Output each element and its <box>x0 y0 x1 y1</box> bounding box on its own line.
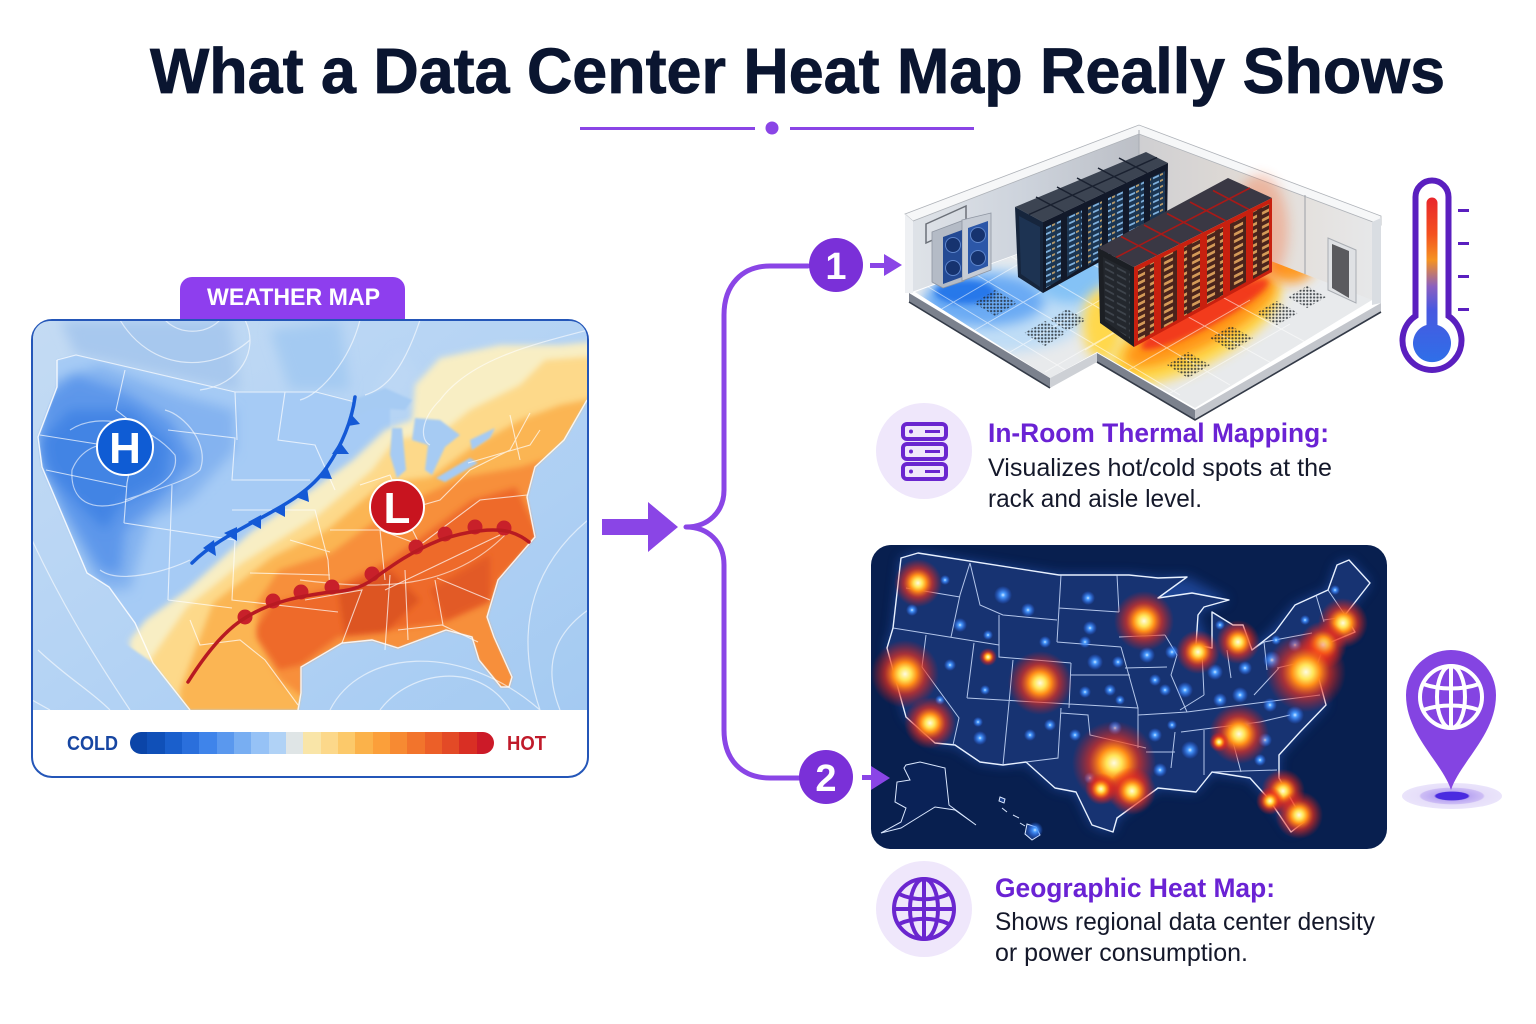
title divider <box>580 122 974 134</box>
hot spots <box>871 559 1368 839</box>
low pressure marker <box>370 480 424 534</box>
weather map tab: WEATHER MAP <box>207 284 380 311</box>
text: geographic heat map: Geographic Heat Map: <box>995 873 1275 903</box>
text: geographic heat map: Shows regional data center density <box>995 908 1375 936</box>
cooling units <box>926 206 991 288</box>
step badge 2: 2 <box>815 758 837 800</box>
temperature map <box>32 320 610 730</box>
land hot bands <box>130 340 610 730</box>
arrow: weather map to heat map types <box>602 502 678 552</box>
blue city lights <box>906 575 1340 838</box>
step badge 1: 1 <box>825 246 847 288</box>
panel: weather map <box>32 277 610 777</box>
state lines <box>40 355 540 705</box>
contour lines <box>32 320 588 710</box>
high pressure marker: H <box>109 424 141 473</box>
walls <box>905 125 1381 305</box>
geographic heat map <box>871 545 1387 849</box>
panel frame <box>32 320 588 777</box>
step badge 1 <box>809 238 863 292</box>
hot server row <box>1098 175 1288 347</box>
thermal floor <box>915 254 1372 408</box>
land <box>887 553 1370 832</box>
cold front <box>192 397 360 563</box>
temperature scale bar <box>130 732 494 754</box>
warm front <box>188 520 529 682</box>
isometric data hall <box>900 125 1390 420</box>
weather map tab <box>180 277 405 320</box>
inset territories <box>881 762 1040 840</box>
cold label: COLD <box>67 733 118 755</box>
high pressure marker <box>97 419 153 475</box>
icon: location pin with globe <box>1402 650 1502 809</box>
text: geographic heat map: or power consumption. <box>995 939 1248 967</box>
room door <box>1328 238 1356 303</box>
state borders <box>893 563 1345 775</box>
text: geographic heat map <box>995 873 1375 967</box>
hot label: HOT <box>507 733 546 755</box>
icon: thermometer <box>1403 180 1469 370</box>
icon: globe <box>876 861 972 957</box>
bracket connector <box>686 266 808 778</box>
coastline <box>38 360 587 710</box>
arrow: step 1 <box>870 254 902 276</box>
floor vents <box>974 286 1326 378</box>
great lakes <box>353 388 495 482</box>
land glow <box>887 553 1370 832</box>
step badge 2 <box>799 750 853 804</box>
arrow: step 2 <box>862 766 890 790</box>
text: in-room thermal mapping: In-Room Thermal Mapping: <box>988 418 1329 448</box>
low pressure marker: L <box>384 484 410 533</box>
text: in-room thermal mapping <box>988 418 1332 513</box>
cool server row <box>1015 152 1168 293</box>
text: in-room thermal mapping: Visualizes hot/cold spots at the <box>988 454 1332 482</box>
land cold bands <box>37 356 390 628</box>
slab <box>909 293 1381 420</box>
floor tile grid <box>928 256 1304 395</box>
icon: server <box>876 403 972 499</box>
title: What a Data Center Heat Map Really Shows <box>150 35 1445 107</box>
text: in-room thermal mapping: rack and aisle level. <box>988 485 1202 513</box>
